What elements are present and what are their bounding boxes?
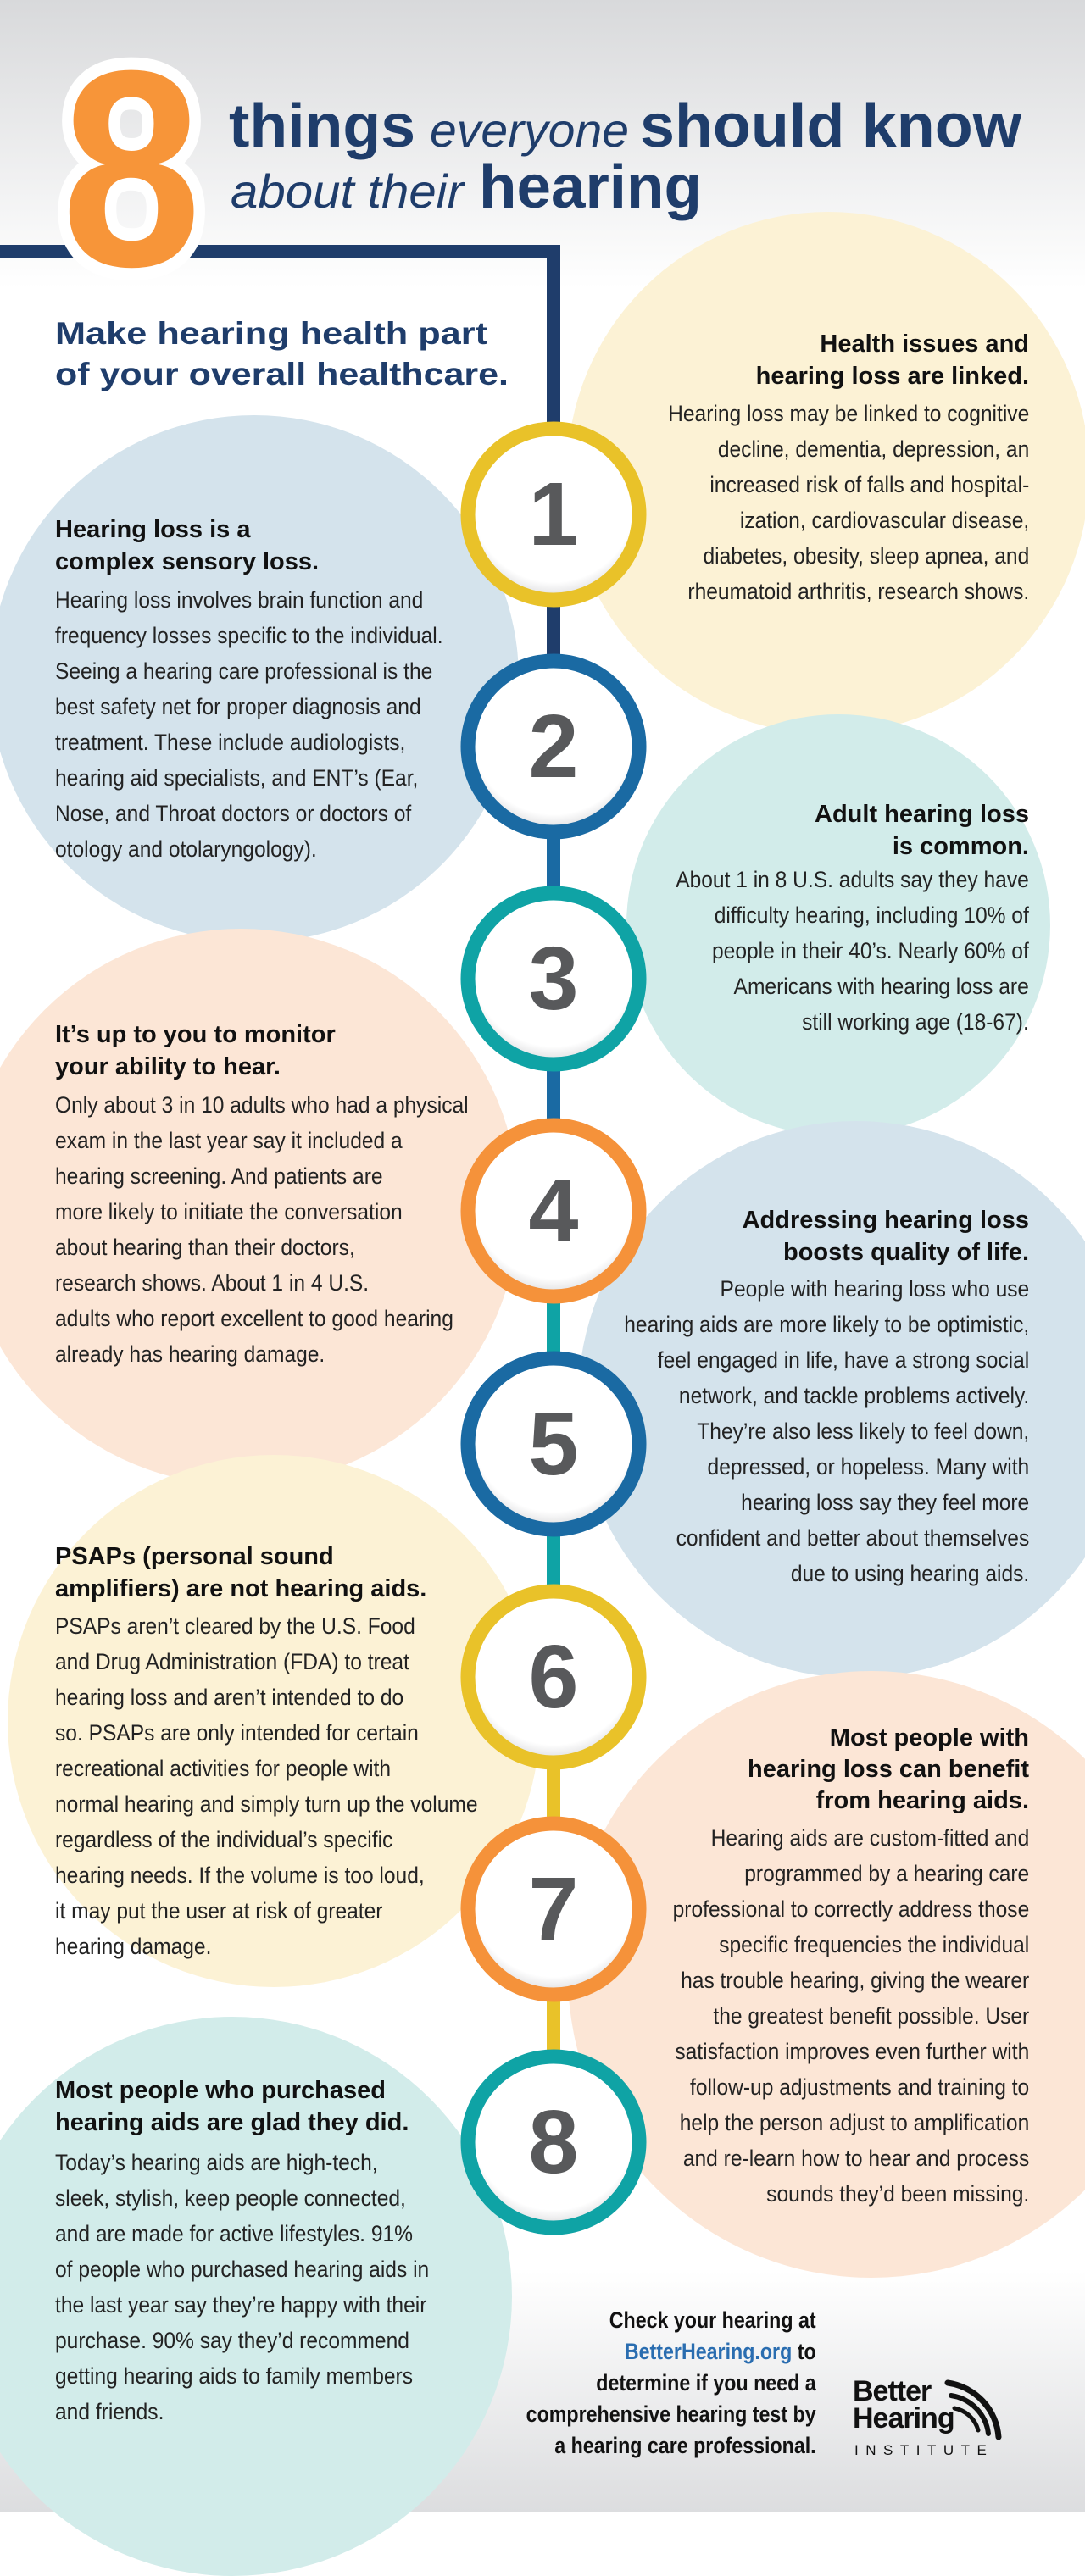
panel 8 left: glad they did: Most people who purchased xyxy=(55,2077,386,2104)
circle 2: 2 xyxy=(529,697,578,797)
circle 1: 1 xyxy=(529,464,578,564)
logo: Better Hearing Institute: Hearing xyxy=(853,2402,954,2434)
panel 2 right: adult hearing loss common: still working age (18-67). xyxy=(802,1009,1029,1035)
circle 3 xyxy=(468,893,639,1064)
subheading: Make hearing health part xyxy=(55,316,487,351)
title: should know xyxy=(640,92,1022,160)
panel 2 right: adult hearing loss common: is common. xyxy=(893,833,1029,860)
panel 1 right: health issues: Health issues and xyxy=(820,330,1029,358)
circle 2 xyxy=(468,661,639,832)
panel 1 right: health issues: increased risk of falls and hospital- xyxy=(709,472,1029,497)
panel 2 right: adult hearing loss common: Americans with hearing loss are xyxy=(734,974,1029,999)
panel 2 right: adult hearing loss common: About 1 in 8 U.S. adults say they have xyxy=(676,867,1029,892)
background circle 1 right yellow xyxy=(567,212,1085,734)
background circle 6 left yellow xyxy=(8,1455,540,1987)
panel 6 left: PSAPs: hearing damage. xyxy=(55,1934,211,1959)
circle 4: 4 xyxy=(529,1161,579,1261)
circle 7: 7 xyxy=(529,1859,578,1959)
footer call to action: Check your hearing at xyxy=(609,2307,816,2333)
title: things xyxy=(229,92,415,160)
panel 8 left: glad they did: the last year say they’re happy with their xyxy=(55,2292,426,2318)
panel 1 right: health issues: decline, dementia, depression, an xyxy=(718,436,1029,462)
panel 4 right: quality of life: confident and better about themselves xyxy=(676,1525,1029,1551)
panel 7 right: benefit from hearing aids: and re-learn how to hear and process xyxy=(683,2146,1029,2171)
footer call to action xyxy=(526,2307,816,2458)
panel 6 left: PSAPs: amplifiers) are not hearing aids. xyxy=(55,1575,426,1602)
panel 7 right: benefit from hearing aids: satisfaction improves even further with xyxy=(675,2039,1029,2064)
panel 7 right: benefit from hearing aids: programmed by a hearing care xyxy=(744,1861,1029,1886)
logo: Better Hearing Institute: INSTITUTE xyxy=(854,2442,993,2458)
circle 3: 3 xyxy=(529,929,578,1029)
panel 4 right: quality of life: due to using hearing aids. xyxy=(791,1561,1029,1586)
panel 6 left: PSAPs: PSAPs (personal sound xyxy=(55,1543,334,1570)
panel 3 left: monitor your hearing: about hearing than their doctors, xyxy=(55,1235,355,1260)
footer call to action: a hearing care professional. xyxy=(555,2433,816,2458)
panel 1 right: health issues: diabetes, obesity, sleep apnea, and xyxy=(703,543,1029,569)
panel 7 right: benefit from hearing aids: Hearing aids are custom-fitted and xyxy=(710,1825,1029,1851)
circle 4 xyxy=(468,1125,639,1296)
panel 7 right: benefit from hearing aids: specific frequencies the individual xyxy=(719,1932,1029,1957)
background circle 2 left blue xyxy=(0,415,519,942)
panel 1 left: complex sensory loss: Seeing a hearing care professional is the xyxy=(55,658,432,684)
panel 6 left: PSAPs: it may put the user at risk of greater xyxy=(55,1898,382,1924)
panel 3 left: monitor your hearing: more likely to initiate the conversation xyxy=(55,1199,403,1224)
title: hearing xyxy=(479,153,702,221)
panel 6 left: PSAPs: regardless of the individual’s specific xyxy=(55,1827,392,1852)
panel 8 left: glad they did: sleek, stylish, keep people connected, xyxy=(55,2185,406,2211)
panel 4 right: quality of life: People with hearing loss who use xyxy=(720,1276,1029,1302)
subheading: of your overall healthcare. xyxy=(55,357,509,391)
panel 6 left: PSAPs: hearing loss and aren’t intended to do xyxy=(55,1685,403,1710)
panel 4 right: quality of life: network, and tackle problems actively. xyxy=(679,1383,1029,1408)
background circle 5 right blue xyxy=(578,1121,1085,1678)
panel 1 left: complex sensory loss: hearing aid specialists, and ENT’s (Ear, xyxy=(55,765,418,791)
title: about their xyxy=(231,164,465,218)
panel 7 right: benefit from hearing aids xyxy=(672,1724,1029,2207)
panel 6 left: PSAPs: so. PSAPs are only intended for certain xyxy=(55,1720,419,1746)
panel 7 right: benefit from hearing aids: hearing loss can benefit xyxy=(748,1756,1029,1783)
navy frame line xyxy=(0,245,560,525)
panel 6 left: PSAPs: hearing needs. If the volume is too loud, xyxy=(55,1863,425,1888)
panel 1 left: complex sensory loss: best safety net for proper diagnosis and xyxy=(55,694,421,719)
panel 8 left: glad they did: getting hearing aids to family members xyxy=(55,2363,413,2389)
background circle 3 right teal xyxy=(626,714,1050,1136)
panel 6 left: PSAPs xyxy=(55,1543,477,1959)
panel 3 left: monitor your hearing: hearing screening. And patients are xyxy=(55,1163,383,1189)
circle 5: 5 xyxy=(529,1394,578,1494)
panel 1 left: complex sensory loss: frequency losses specific to the individual. xyxy=(55,623,443,648)
panel 4 right: quality of life: feel engaged in life, have a strong social xyxy=(658,1347,1029,1373)
panel 1 left: complex sensory loss: otology and otolaryngology). xyxy=(55,836,317,862)
title xyxy=(229,92,1022,221)
panel 7 right: benefit from hearing aids: has trouble hearing, giving the wearer xyxy=(681,1968,1029,1993)
background circle 4 left peach xyxy=(0,929,519,1485)
title: everyone xyxy=(430,103,629,157)
panel 6 left: PSAPs: normal hearing and simply turn up the volume xyxy=(55,1791,477,1817)
panel 3 left: monitor your hearing: already has hearing damage. xyxy=(55,1341,325,1367)
background circle 7 right peach xyxy=(568,1671,1085,2278)
panel 1 right: health issues: rheumatoid arthritis, research shows. xyxy=(687,579,1029,604)
panel 7 right: benefit from hearing aids: from hearing aids. xyxy=(816,1787,1029,1814)
panel 2 right: adult hearing loss common: Adult hearing loss xyxy=(815,801,1029,828)
footer call to action: determine if you need a xyxy=(597,2370,816,2396)
circle 5 xyxy=(468,1358,639,1530)
panel 6 left: PSAPs: PSAPs aren’t cleared by the U.S. Food xyxy=(55,1613,415,1639)
footer call to action: comprehensive hearing test by xyxy=(526,2401,816,2427)
panel 1 right: health issues: ization, cardiovascular disease, xyxy=(740,508,1029,533)
background circle 8 left teal xyxy=(0,2017,512,2576)
panel 6 left: PSAPs: recreational activities for people with xyxy=(55,1756,391,1781)
circle 8 xyxy=(468,2057,639,2228)
panel 7 right: benefit from hearing aids: the greatest benefit possible. User xyxy=(713,2003,1029,2029)
panel 7 right: benefit from hearing aids: Most people with xyxy=(830,1724,1029,1752)
panel 7 right: benefit from hearing aids: professional to correctly address those xyxy=(672,1896,1029,1922)
circle 6: 6 xyxy=(529,1627,578,1727)
panel 8 left: glad they did: and friends. xyxy=(55,2399,164,2424)
panel 1 left: complex sensory loss: complex sensory loss. xyxy=(55,548,319,575)
panel 7 right: benefit from hearing aids: sounds they’d been missing. xyxy=(766,2181,1029,2207)
panel 8 left: glad they did xyxy=(55,2077,429,2424)
circle 6 xyxy=(468,1591,639,1763)
panel 3 left: monitor your hearing: research shows. About 1 in 4 U.S. xyxy=(55,1270,369,1296)
big orange 8: 8 xyxy=(61,12,202,325)
logo: Better Hearing Institute: Better xyxy=(853,2375,931,2407)
panel 1 left: complex sensory loss xyxy=(55,516,443,862)
panel 1 right: health issues: hearing loss are linked. xyxy=(756,363,1029,390)
logo arcs xyxy=(948,2383,999,2437)
panel 1 right: health issues xyxy=(668,330,1029,604)
panel 3 left: monitor your hearing: exam in the last year say it included a xyxy=(55,1128,403,1153)
logo: Better Hearing Institute xyxy=(853,2375,993,2458)
panel 1 right: health issues: Hearing loss may be linked to cognitive xyxy=(668,401,1029,426)
subheading xyxy=(55,316,509,391)
panel 1 left: complex sensory loss: treatment. These include audiologists, xyxy=(55,730,405,755)
panel 4 right: quality of life xyxy=(624,1207,1029,1586)
panel 3 left: monitor your hearing xyxy=(55,1021,469,1367)
panel 8 left: glad they did: and are made for active lifestyles. 91% xyxy=(55,2221,413,2246)
panel 4 right: quality of life: They’re also less likely to feel down, xyxy=(697,1418,1029,1444)
footer call to action: BetterHearing.org to xyxy=(625,2339,816,2364)
panel 4 right: quality of life: hearing loss say they feel more xyxy=(741,1490,1029,1515)
panel 2 right: adult hearing loss common: difficulty hearing, including 10% of xyxy=(715,902,1029,928)
panel 2 right: adult hearing loss common: people in their 40’s. Nearly 60% of xyxy=(712,938,1029,963)
panel 4 right: quality of life: depressed, or hopeless. Many with xyxy=(707,1454,1029,1480)
panel 6 left: PSAPs: and Drug Administration (FDA) to treat xyxy=(55,1649,409,1674)
panel 1 left: complex sensory loss: Hearing loss involves brain function and xyxy=(55,587,423,613)
panel 7 right: benefit from hearing aids: help the person adjust to amplification xyxy=(680,2110,1029,2135)
panel 3 left: monitor your hearing: Only about 3 in 10 adults who had a physical xyxy=(55,1092,469,1118)
circle 1 xyxy=(468,429,639,600)
number circles xyxy=(468,429,639,2228)
panel 3 left: monitor your hearing: It’s up to you to monitor xyxy=(55,1021,336,1048)
panel 8 left: glad they did: hearing aids are glad they did. xyxy=(55,2109,409,2136)
circle 8: 8 xyxy=(529,2092,578,2192)
panel 4 right: quality of life: Addressing hearing loss xyxy=(743,1207,1029,1234)
panel 8 left: glad they did: purchase. 90% say they’d recommend xyxy=(55,2328,409,2353)
panel 1 left: complex sensory loss: Hearing loss is a xyxy=(55,516,251,543)
panel 3 left: monitor your hearing: your ability to hear. xyxy=(55,1053,281,1080)
panel 3 left: monitor your hearing: adults who report excellent to good hearing xyxy=(55,1306,453,1331)
connectors xyxy=(547,593,560,2076)
panel 4 right: quality of life: boosts quality of life. xyxy=(783,1239,1029,1266)
circle 7 xyxy=(468,1824,639,1995)
panel 7 right: benefit from hearing aids: follow-up adjustments and training to xyxy=(690,2074,1029,2100)
panel 8 left: glad they did: Today’s hearing aids are high-tech, xyxy=(55,2150,378,2175)
panel 4 right: quality of life: hearing aids are more likely to be optimistic, xyxy=(624,1312,1029,1337)
panel 2 right: adult hearing loss common xyxy=(676,801,1029,1035)
panel 1 left: complex sensory loss: Nose, and Throat doctors or doctors of xyxy=(55,801,411,826)
panel 8 left: glad they did: of people who purchased hearing aids in xyxy=(55,2257,429,2282)
